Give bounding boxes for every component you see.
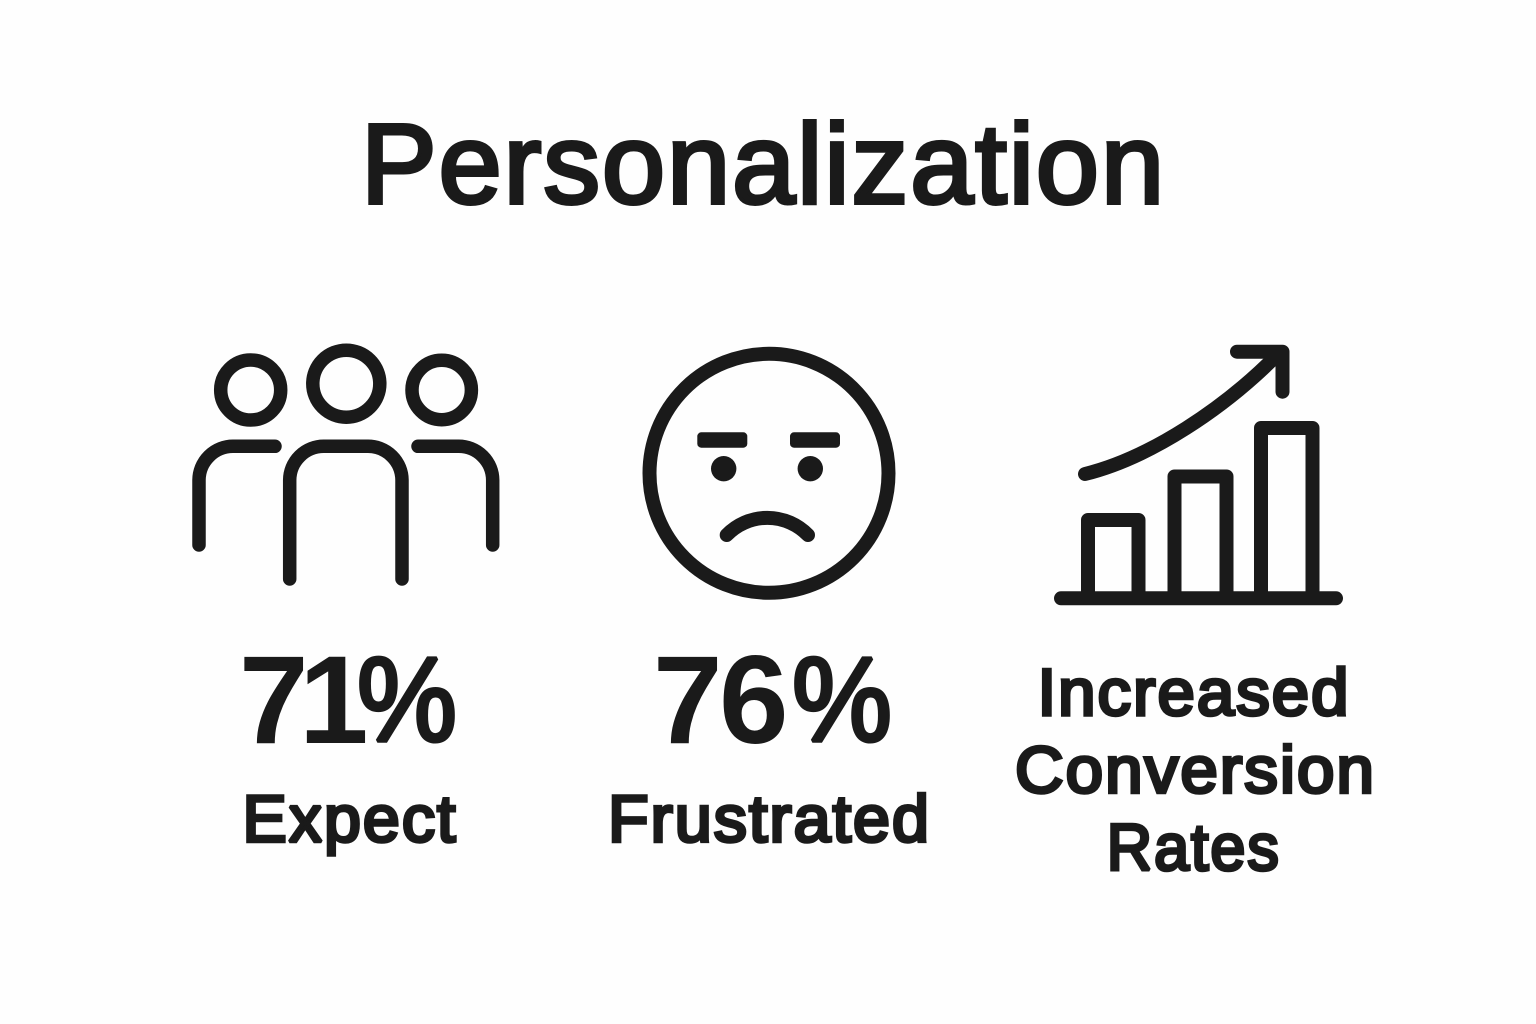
title: Personalization bbox=[361, 101, 1166, 227]
panel: conversion bbox=[1015, 352, 1376, 884]
stat: 71%: % bbox=[357, 633, 457, 767]
label: Frustrated: Frustrated bbox=[608, 782, 931, 856]
label: Expect: Expect bbox=[242, 782, 458, 856]
icon: rising bar chart with arrow bbox=[1061, 352, 1336, 598]
icon: group of people bbox=[199, 350, 493, 579]
label: Increased Conversion Rates: Rates bbox=[1107, 810, 1281, 884]
stat: 76% bbox=[653, 631, 892, 770]
label: Increased Conversion Rates bbox=[1015, 655, 1376, 884]
stat: 71%: 71 bbox=[239, 631, 369, 770]
panel: frustrated bbox=[608, 354, 931, 856]
icon: frowning face bbox=[650, 354, 888, 593]
stat: 76%: 76 bbox=[653, 631, 789, 770]
stat: 71% bbox=[239, 631, 457, 770]
panel: expect bbox=[199, 350, 493, 856]
stat: 76%: % bbox=[792, 633, 892, 767]
label: Increased Conversion Rates: Increased bbox=[1038, 655, 1350, 729]
label: Increased Conversion Rates: Conversion bbox=[1015, 732, 1376, 806]
